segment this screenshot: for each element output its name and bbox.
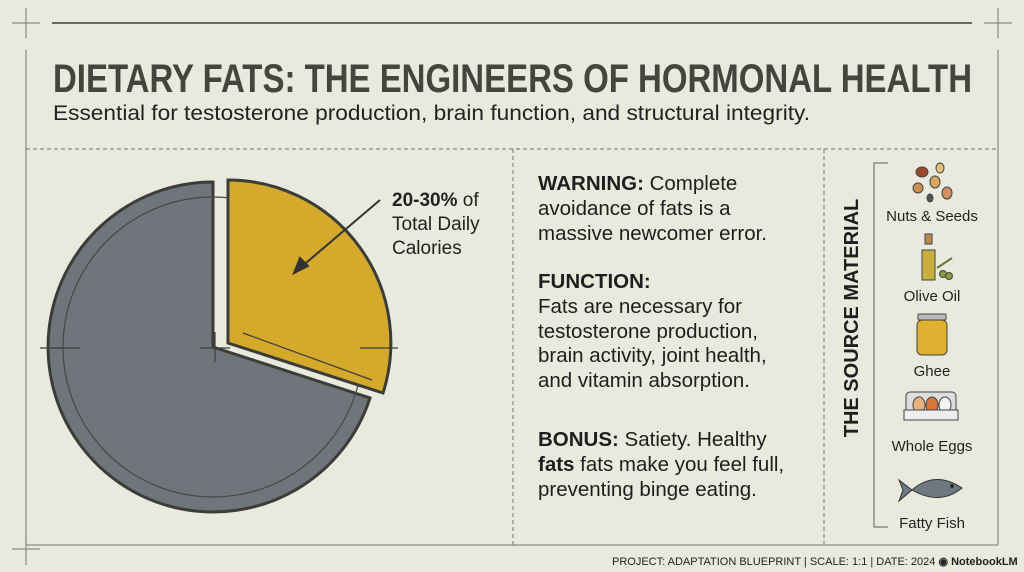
middle text: testosterone production, [538,320,758,343]
text: Olive Oil [904,288,960,305]
pie label: Total Daily [392,214,480,235]
text: Whole Eggs [892,438,972,455]
subtitle: Essential for testosterone production, brain function, and structural integrity. [53,102,810,125]
middle text: BONUS: Satiety. Healthy [538,428,767,451]
icon: olive oil [922,234,952,280]
icon: nuts [913,163,952,202]
text: Fatty Fish [899,515,965,532]
source material heading: THE SOURCE MATERIAL [841,199,863,437]
middle text: preventing binge eating. [538,478,757,501]
icon: fish [899,479,962,501]
icon: eggs [904,392,958,420]
middle text: avoidance of fats is a [538,197,731,220]
pie chart [40,180,398,512]
text: Ghee [914,363,950,380]
middle text: massive newcomer error. [538,222,767,245]
middle text: FUNCTION: [538,270,651,293]
middle text: WARNING: Complete [538,172,737,195]
pie label: 20-30% of [392,190,479,211]
pie label: Calories [392,238,462,259]
arrow [294,200,380,273]
middle text: Fats are necessary for [538,295,742,318]
middle text: and vitamin absorption. [538,369,750,392]
middle text [538,172,784,501]
footer: PROJECT: ADAPTATION BLUEPRINT | SCALE: 1:1 | DATE: 2024 ◉ NotebookLM [612,556,1018,568]
text: Nuts & Seeds [886,208,978,225]
pie label [392,190,480,259]
middle text: brain activity, joint health, [538,344,767,367]
middle text: fats fats make you feel full, [538,453,784,476]
icon: ghee [917,314,947,355]
